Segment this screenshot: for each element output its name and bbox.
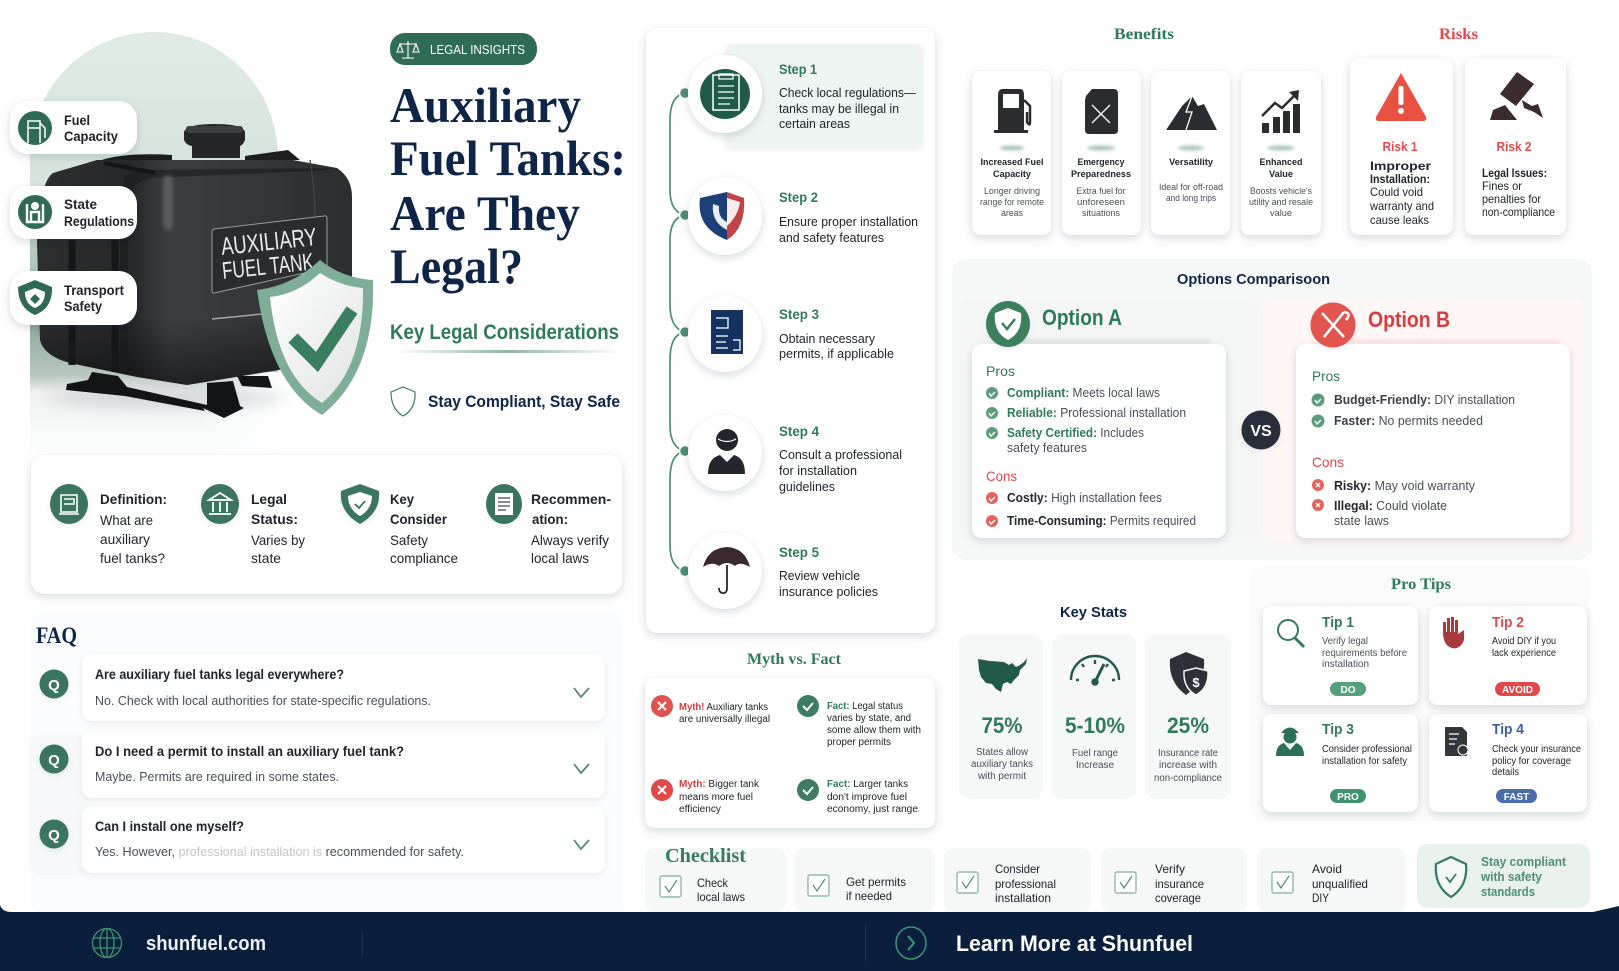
risks heading: Risks [1439,26,1478,43]
title: Are They [390,185,580,241]
icon: shield with dollar: $ [1192,675,1200,690]
compliance callout [1417,844,1590,908]
feature pill: state regulations [10,186,137,239]
tip 1: DO [1340,685,1356,696]
feature pill: fuel capacity [10,101,137,154]
option B: Option B [1368,307,1450,332]
benefit card: increased fuel capacity: range for remote [980,197,1044,207]
myth 1 [651,695,770,725]
benefits heading: Benefits [1114,26,1174,43]
icon: shield [700,192,744,240]
option A: Compliant: Meets local laws [1007,386,1160,400]
key consideration [341,484,458,566]
stat card: 75%: with permit [977,771,1026,782]
FAQ heading: FAQ [36,623,77,648]
checklist item 2: Get permits [846,875,906,889]
tip 3: Consider professional [1322,744,1412,755]
FAQ item 3 [40,806,605,873]
compliance callout: with safety [1480,870,1542,884]
step 1: tanks may be illegal in [779,102,899,116]
badge: legal insights: LEGAL INSIGHTS [430,43,525,57]
checklist item 2: if needed [846,889,892,903]
step 4: Consult a professional [779,448,902,462]
icon: fuel pump [18,111,52,145]
FAQ item 2: Q [48,752,60,769]
benefit card: versatility [1151,71,1230,235]
option A: Pros [986,363,1015,379]
step 4: for installation [779,464,857,478]
icon: worker [1276,728,1304,756]
step 1 highlight [725,44,923,148]
feature pill: transport safety [10,271,137,325]
icon: tools [1310,302,1356,348]
benefit card: emergency preparedness [1062,71,1141,235]
icon: umbrella [703,547,750,593]
recommendation: local laws [531,550,589,566]
FAQ item 2: Maybe. Permits are required in some states. [95,769,339,784]
benefit card: emergency preparedness: unforeseen [1077,197,1125,207]
checklist item 2 [808,875,906,903]
checklist heading: Checklist [665,846,747,867]
feature pill: fuel capacity: Fuel [64,112,90,128]
step 5: Review vehicle [779,569,860,583]
benefit card: enhanced value [1241,71,1321,235]
legal status: Legal [251,491,287,507]
tip 1: installation [1322,659,1369,670]
myth 2 [651,779,760,815]
option B: Budget-Friendly: DIY installation [1334,393,1515,407]
VS badge [1242,410,1280,450]
risk card 1: Installation: [1370,174,1430,186]
fact 1: proper permits [827,737,891,748]
option A: Safety Certified: Includes [1007,426,1144,440]
stat card: 5-10%: 5-10% [1065,713,1125,738]
icon: fuel pump [994,89,1030,133]
option B: state laws [1334,514,1389,528]
VS badge: VS [1250,423,1272,440]
FAQ item 3: Q [48,827,60,844]
checklist item 4: Verify [1155,862,1185,876]
icon: professional [708,429,745,474]
tip 4: Check your insurance [1492,744,1581,755]
option A: Reliable: Professional installation [1007,406,1186,420]
FAQ item 3: Can I install one myself? [95,819,244,834]
title: Auxiliary [390,77,581,133]
title [390,77,626,294]
tip 1: Verify legal [1322,636,1368,647]
benefit card: increased fuel capacity: Longer driving [984,186,1040,196]
FAQ item 1: Q [48,677,60,694]
icon: US map [978,658,1027,692]
tip 4: policy for coverage [1492,756,1571,767]
step 1: Step 1 [779,61,817,77]
option B: Risky: May void warranty [1334,479,1476,493]
step 5 [688,533,878,609]
feature pill: state regulations: Regulations [64,213,134,229]
key consideration: Consider [390,511,448,527]
footer call to action: Learn More at Shunfuel [956,931,1193,956]
FAQ item 3: Yes. However, professional installation is recommended for safety. [95,844,464,859]
feature pill: transport safety: Transport [64,282,124,298]
timeline connector [670,88,690,576]
myth 2: Myth: Bigger tank [679,779,760,790]
myth 1: are universally illegal [679,714,770,725]
icon: gavel [1490,72,1543,120]
icon: growth chart [1262,90,1300,133]
benefit card: increased fuel capacity: Increased Fuel [980,157,1044,168]
fact 2: Fact: Larger tanks [827,779,908,790]
benefit card: versatility: and long trips [1166,193,1216,203]
FAQ item 2: Do I need a permit to install an auxiliary fuel tank? [95,744,404,759]
step 2 [688,177,918,255]
tip 2 [1429,606,1587,705]
FAQ item 1 [40,654,605,721]
tip 3 [1263,714,1418,812]
tip 4 [1429,714,1587,812]
legal status: Status: [251,511,298,527]
step 3: Step 3 [779,306,819,322]
option A [960,300,1257,538]
benefit card: enhanced value: utility and resale [1249,197,1313,207]
risk card 1: Could void [1370,185,1423,199]
icon: magnifier [1278,620,1304,647]
tip 2: Tip 2 [1492,615,1524,631]
icon: arrow circle [896,927,926,959]
definition: auxiliary [100,531,150,547]
step 4 [688,415,902,494]
option A: Costly: High installation fees [1007,491,1162,505]
checklist item 5: DIY [1312,891,1329,905]
benefit card: emergency preparedness: Extra fuel for [1076,186,1126,196]
checklist item 5: unqualified [1312,877,1368,891]
risk card 1: warranty and [1369,199,1434,213]
tip 2: lack experience [1492,648,1556,659]
step 2: Step 2 [779,189,818,205]
hero illustration: auxiliary fuel tank with shield [30,32,373,451]
tip 4: Tip 4 [1492,722,1524,738]
step 4: Step 4 [779,423,819,439]
footer bar [0,905,1619,971]
shield with checkmark [257,260,373,415]
benefit card: enhanced value: Enhanced [1260,157,1303,168]
icon: scales [397,41,419,58]
fact 1: Fact: Legal status [827,701,903,712]
benefit card: versatility: Versatility [1169,157,1214,168]
stat card: 25%: non-compliance [1154,773,1222,784]
key consideration: compliance [390,550,458,566]
stat card: 75% [959,634,1043,799]
tank label plate: AUXILIARY [220,223,318,261]
option A: Option A [1042,305,1122,330]
icon: shield with dollar [1170,652,1208,695]
definition: What are [100,512,153,528]
myth 2: means more fuel [679,792,753,803]
tagline: stay compliant: Stay Compliant, Stay Safe [428,393,620,411]
stat card: 25% [1145,634,1231,799]
checklist item 1 [660,876,745,904]
tip 1 [1263,606,1418,705]
stat card: 75%: auxiliary tanks [971,759,1033,770]
checklist item 4 [1115,862,1204,905]
tip 2: AVOID [1502,685,1533,696]
legal status: state [251,550,281,566]
panel: FAQ [29,613,622,913]
fact 1: some allow them with [827,725,921,736]
myth 2: efficiency [679,804,721,815]
risk card 1: cause leaks [1370,213,1429,227]
panel: key definitions [31,455,622,594]
option A: Time-Consuming: Permits required [1007,514,1196,528]
arch backdrop [30,32,278,451]
step 2: and safety features [779,231,884,245]
fact 1: varies by state, and [827,713,911,724]
benefit card: versatility: Ideal for off-road [1159,182,1223,192]
tank label plate: FUEL TANK [221,248,315,285]
step 3: Obtain necessary [779,332,876,346]
fact 2: don't improve fuel [827,792,907,803]
benefit card: enhanced value: value [1270,208,1292,218]
benefit card: emergency preparedness: Emergency [1078,157,1125,168]
benefit card: enhanced value: Boosts vehicle's [1250,186,1312,196]
risk card 2 [1465,58,1566,235]
checklist item 4: coverage [1155,891,1201,905]
panel: options comparison [952,259,1592,560]
benefit card: increased fuel capacity: areas [1001,208,1023,218]
icon: globe [92,928,122,958]
checklist item 4: insurance [1155,877,1204,891]
step 1: certain areas [779,117,850,131]
checklist item 3: Consider [995,862,1040,876]
legal status [201,484,305,566]
pro tips heading: Pro Tips [1391,576,1451,593]
feature pill: transport safety: Safety [64,298,102,314]
icon: permit form [711,310,743,354]
definition: Definition: [100,491,167,507]
icon: policy document [1445,727,1468,756]
feature pill: fuel capacity: Capacity [64,128,118,144]
stat card: 25%: 25% [1167,713,1209,738]
benefit card: increased fuel capacity: Capacity [993,169,1032,180]
panel: pro tips [1251,566,1590,821]
step 5: insurance policies [779,585,878,599]
feature pill: state regulations: State [64,196,97,212]
tip 3: Tip 3 [1322,722,1354,738]
icon: shield check [986,301,1030,347]
tip 3: installation for safety [1322,756,1407,767]
icon: shield [18,280,52,315]
subheading: key legal considerations: Key Legal Considerations [390,321,619,344]
stat card: 5-10%: Fuel range [1072,748,1118,759]
panel: myth vs fact [645,678,935,828]
step 5: Step 5 [779,544,819,560]
stat card: 75%: States allow [976,747,1029,758]
risk card 1: Improper [1370,161,1432,173]
risk card 2: penalties for [1482,192,1541,206]
FAQ item 1: Are auxiliary fuel tanks legal everywhere? [95,667,344,682]
checklist item 3: installation [995,891,1051,905]
tip 2: Avoid DIY if you [1492,636,1556,647]
tip 3: PRO [1337,792,1359,803]
benefit card: emergency preparedness: Preparedness [1071,169,1131,180]
benefit card: enhanced value: Value [1269,169,1293,180]
checklist item 3: professional [995,877,1056,891]
option B [1263,300,1584,543]
myth 1: Myth! Auxiliary tanks [679,702,768,713]
checklist item 1: local laws [697,890,745,904]
option B: Faster: No permits needed [1334,414,1483,428]
title: Fuel Tanks: [390,130,626,186]
icon: clipboard [700,69,750,119]
stat card: 75%: 75% [982,713,1022,738]
subheading: key legal considerations [390,321,619,353]
recommendation: Recommen- [531,491,611,507]
tagline: stay compliant [391,387,620,416]
benefit card: emergency preparedness: situations [1082,208,1120,218]
panel: checklist [645,844,1590,912]
definition: fuel tanks? [100,550,165,566]
stat card: 25%: Insurance rate [1158,748,1218,759]
tip 1: requirements before [1322,648,1407,659]
icon: stop hand [1443,617,1464,648]
option A: Cons [986,468,1017,484]
fact 2 [797,779,918,815]
stat card: 25%: increase with [1159,760,1217,771]
footer site url: shunfuel.com [146,933,266,955]
checklist item 5: Avoid [1312,862,1342,876]
option A: safety features [1007,441,1087,455]
step 1 [688,55,916,133]
compliance callout: Stay compliant [1481,855,1567,869]
checklist item 5 [1272,862,1368,905]
key consideration: Key [390,491,414,507]
icon: mountains [1166,96,1217,130]
tip 4: FAST [1504,792,1529,803]
FAQ item 2 [40,731,605,798]
tip 1: Tip 1 [1322,615,1354,631]
icon: figure with scales [18,195,52,229]
risk card 1 [1350,58,1453,235]
stat card: 5-10%: Increase [1076,760,1114,771]
recommendation: Always verify [531,532,609,548]
risk card 2: non-compliance [1482,205,1555,219]
tank [37,124,352,418]
myth vs fact heading: Myth vs. Fact [747,651,842,668]
step 2: Ensure proper installation [779,215,918,229]
stat card: 5-10% [1052,634,1136,799]
option B: Pros [1312,368,1340,384]
title: Legal? [390,238,523,294]
step 3 [688,296,894,372]
step 1: Check local regulations— [779,86,916,100]
step 4: guidelines [779,480,835,494]
definition [50,484,167,566]
badge: legal insights [390,33,537,65]
key consideration: Safety [390,532,428,548]
legal status: Varies by [251,532,305,548]
recommendation [486,484,611,566]
tip 4: details [1492,767,1519,778]
fact 2: economy, just range [827,804,918,815]
option B: Illegal: Could violate [1334,499,1447,513]
risk card 1: Risk 1 [1382,139,1418,154]
icon: warning triangle [1376,73,1426,121]
checklist item 1: Check [697,876,729,890]
step 3: permits, if applicable [779,347,894,361]
key stats heading: Key Stats [1060,604,1127,621]
icon: jerry can [1085,89,1118,134]
benefit card: increased fuel capacity [972,71,1051,235]
compliance callout: standards [1481,885,1535,899]
comparison heading: Options Comparisoon [1177,272,1330,288]
recommendation: ation: [532,511,568,527]
checklist item 3 [957,862,1056,905]
FAQ item 1: No. Check with local authorities for state-specific regulations. [95,693,431,708]
fact 1 [797,695,921,748]
icon: gauge [1071,656,1119,684]
tank label plate [212,216,327,293]
risk card 2: Fines or [1482,179,1522,193]
panel: steps [646,28,935,633]
option B: Cons [1312,454,1344,470]
risk card 2: Risk 2 [1496,139,1532,154]
risk card 2: Legal Issues: [1482,168,1547,180]
